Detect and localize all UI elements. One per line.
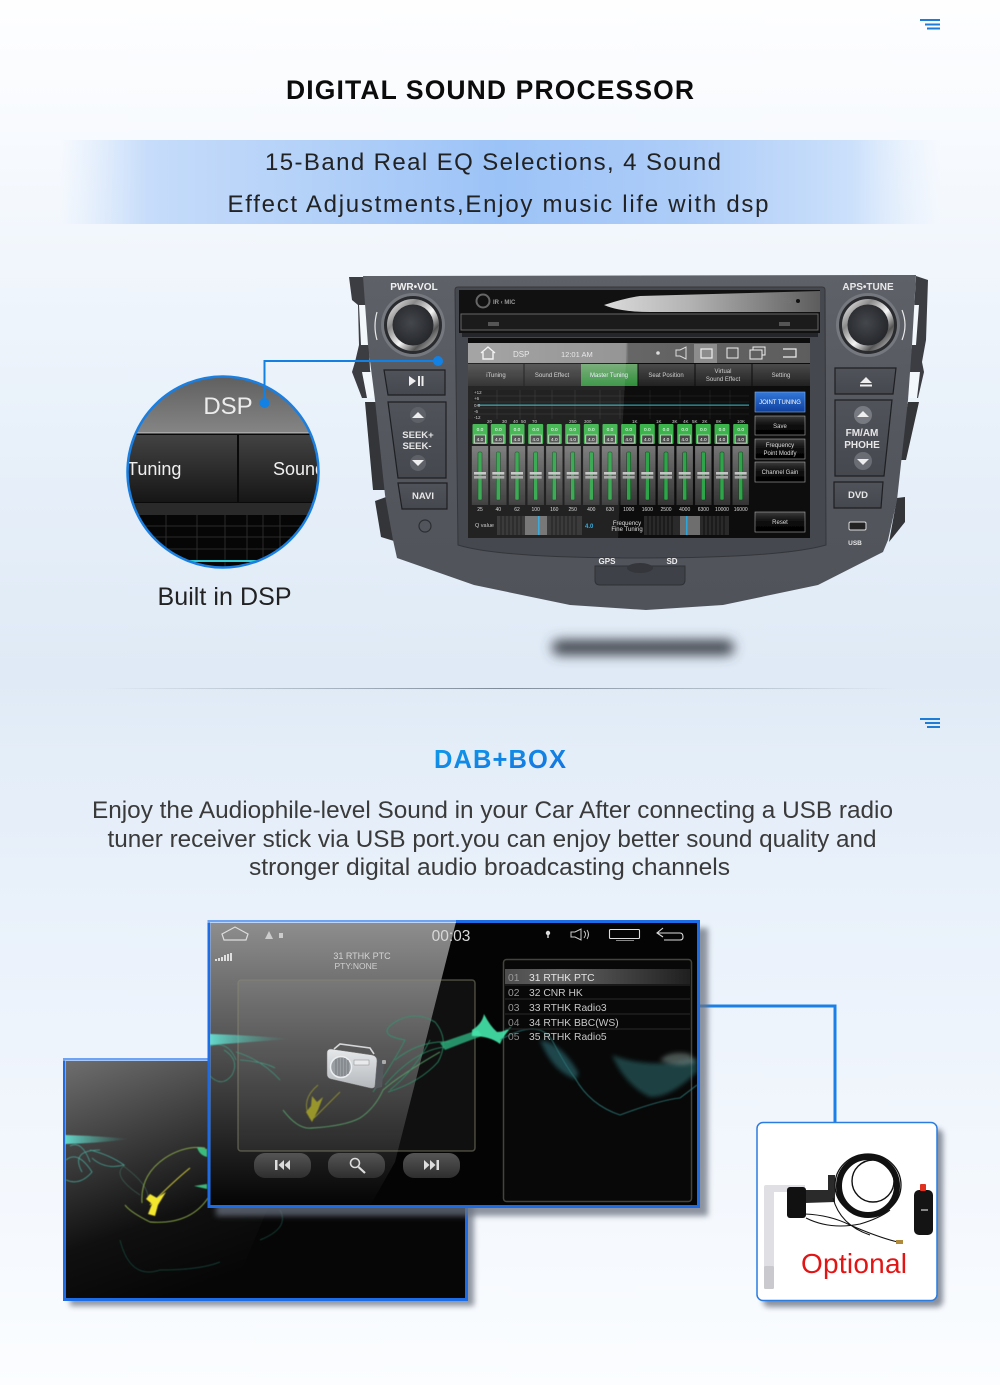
EQ value boxes: 0.0 <box>477 427 484 433</box>
left buttons: NAVI <box>412 491 434 502</box>
EQ value boxes: 0.0 <box>532 427 539 433</box>
tabs: Sound Effect <box>706 377 740 383</box>
right-side buttons: Point Modify <box>763 451 797 457</box>
EQ value boxes: 4.0 <box>607 437 614 443</box>
SD slot cover <box>595 557 685 585</box>
right-side buttons: Frequency <box>766 443 794 449</box>
EQ graph: 20 <box>487 419 493 424</box>
knob right <box>836 282 905 357</box>
smoke: green ribbon <box>210 1014 697 1128</box>
icon: menu lines top <box>920 19 940 30</box>
front panel: DAB radio screen <box>208 922 708 1216</box>
frequency labels: 40 <box>496 507 501 513</box>
arrow: DSP connector line <box>260 356 443 408</box>
EQ sliders <box>472 446 749 505</box>
right mounting bracket <box>889 276 928 542</box>
EQ graph: 10K <box>737 419 745 424</box>
list highlight row <box>505 969 690 984</box>
EQ value boxes: 4.0 <box>700 437 707 443</box>
EQ value boxes: 0.0 <box>588 427 595 433</box>
front panel: DAB radio screen: PTY:NONE <box>335 961 378 971</box>
right buttons: USB <box>848 540 862 547</box>
antenna film strip <box>764 1185 805 1289</box>
EQ value boxes: 4.0 <box>681 437 688 443</box>
description text: tuner receiver stick via USB port.you can enjoy better sound quality and <box>108 826 876 853</box>
right buttons: FM/AM <box>846 428 878 439</box>
antenna block and band <box>805 1175 835 1203</box>
EQ value boxes: 0.0 <box>495 427 502 433</box>
q value row: Fine Tuning <box>611 527 643 533</box>
description text: stronger digital audio broadcasting channels <box>249 854 730 881</box>
EQ value boxes: 4.0 <box>719 437 726 443</box>
EQ value boxes: 0.0 <box>514 427 521 433</box>
EQ graph: 1K <box>632 419 638 424</box>
station list box <box>504 960 692 1202</box>
station list <box>505 973 690 1043</box>
q value row: 4.0 <box>585 524 594 530</box>
disc slot <box>459 290 820 337</box>
EQ value boxes: 4.0 <box>514 437 521 443</box>
status bar: 12:01 AM <box>561 350 593 359</box>
optional label: Optional <box>801 1248 907 1279</box>
disc slot: IR ‹ MIC <box>493 300 516 306</box>
status icons <box>221 926 684 941</box>
shadow under head unit <box>552 640 734 655</box>
EQ value boxes: 4.0 <box>737 437 744 443</box>
EQ graph: -12 <box>474 415 481 420</box>
EQ graph: 2K <box>702 419 708 424</box>
banner: subtitle: Effect Adjustments,Enjoy music life with dsp <box>228 191 768 218</box>
cable coil <box>805 1154 901 1242</box>
station list: 05 <box>508 1032 520 1043</box>
tabs: Seat Position <box>648 373 684 379</box>
frequency labels: 6300 <box>698 507 709 513</box>
EQ graph: -6 <box>474 409 478 414</box>
EQ value boxes: 4.0 <box>663 437 670 443</box>
callout: DSP magnifier: Tuning <box>127 459 181 479</box>
EQ graph: 3K <box>672 419 678 424</box>
tabs: Master Tuning <box>590 373 628 379</box>
circle labels: DSP <box>203 393 253 420</box>
smoke: teal and yellow <box>65 1135 282 1272</box>
station list: 04 <box>508 1018 520 1029</box>
description text: Enjoy the Audiophile-level Sound in your Car After connecting a USB radio <box>92 797 893 824</box>
frequency labels: 400 <box>587 507 596 513</box>
SD slot cover: GPS <box>599 557 616 566</box>
status icons: 00:03 <box>432 928 470 945</box>
EQ value boxes: 0.0 <box>569 427 576 433</box>
EQ graph: 30 <box>502 419 508 424</box>
icon: menu lines lower <box>920 718 940 728</box>
EQ value boxes <box>472 424 748 444</box>
EQ value boxes: 4.0 <box>495 437 502 443</box>
disc slot: RES <box>778 298 792 305</box>
knob left: PWR•VOL <box>390 282 438 293</box>
EQ graph: +12 <box>474 390 482 395</box>
EQ graph: +6 <box>474 396 480 401</box>
left buttons <box>384 370 447 532</box>
EQ value boxes: 0.0 <box>737 427 744 433</box>
EQ value boxes: 0.0 <box>607 427 614 433</box>
EQ graph: 300 <box>584 419 592 424</box>
EQ value boxes: 4.0 <box>532 437 539 443</box>
playback buttons <box>254 1153 460 1178</box>
head unit <box>349 275 928 610</box>
left mounting bracket <box>349 277 394 541</box>
EQ value boxes: 0.0 <box>719 427 726 433</box>
right buttons: DVD <box>848 490 868 501</box>
EQ value boxes: 0.0 <box>625 427 632 433</box>
knob right: APS•TUNE <box>842 282 894 293</box>
frequency labels: 10000 <box>715 507 729 513</box>
right-side buttons: Save <box>773 424 787 430</box>
receiver dongle <box>914 1184 933 1235</box>
EQ value boxes: 0.0 <box>551 427 558 433</box>
screen glare <box>468 343 627 419</box>
EQ graph: 50 <box>521 419 527 424</box>
tabs: Setting <box>772 373 790 379</box>
left buttons: SEEK+ <box>402 430 434 441</box>
frequency labels: 1600 <box>642 507 653 513</box>
frequency labels <box>477 507 748 513</box>
screen bezel <box>455 287 826 558</box>
screen: DSP equalizer <box>468 338 810 538</box>
EQ value boxes: 0.0 <box>681 427 688 433</box>
callout: DSP magnifier: Sound <box>273 459 325 479</box>
frequency labels: 4000 <box>679 507 690 513</box>
icon: radio <box>327 1044 386 1089</box>
connector to optional box <box>700 1006 835 1124</box>
caption: built in DSP: Built in DSP <box>158 583 292 611</box>
EQ value boxes: 0.0 <box>700 427 707 433</box>
frequency labels: 62 <box>514 507 520 513</box>
right buttons <box>834 368 896 547</box>
heading: DAB+BOX: DAB+BOX <box>434 746 566 774</box>
signal bars <box>216 953 231 961</box>
tabs: iTuning <box>486 373 506 379</box>
SD slot cover: SD <box>666 557 678 566</box>
station list: 03 <box>508 1003 520 1014</box>
optional antenna box <box>757 1122 943 1307</box>
EQ graph <box>473 390 749 424</box>
station info: 31 RTHK PTC <box>333 951 391 961</box>
right-side buttons: Reset <box>772 520 788 526</box>
EQ graph: 1K <box>656 419 662 424</box>
station list: 34 RTHK BBC(WS) <box>529 1018 619 1029</box>
banner: subtitle: 15-Band Real EQ Selections, 4 Sound <box>265 149 721 176</box>
EQ value boxes: 4.0 <box>588 437 595 443</box>
EQ graph: 250 <box>569 419 577 424</box>
album art box <box>238 980 475 1151</box>
status bar: DSP <box>513 350 529 359</box>
tabs <box>468 364 810 386</box>
tabs: Sound Effect <box>535 373 569 379</box>
station list: 01 <box>508 973 520 984</box>
banner: subtitle <box>60 140 940 224</box>
EQ graph: 40 <box>513 419 519 424</box>
right-side buttons: JOINT TUNING <box>759 400 801 406</box>
EQ value boxes: 4.0 <box>551 437 558 443</box>
station list: 32 CNR HK <box>529 988 583 999</box>
smoke: soft blobs <box>540 1040 697 1097</box>
back panel: wallpaper screen <box>63 1060 474 1306</box>
frequency labels: 100 <box>532 507 540 513</box>
EQ value boxes: 4.0 <box>625 437 632 443</box>
unit body <box>363 275 916 610</box>
EQ graph: 8K <box>716 419 722 424</box>
EQ value boxes: 4.0 <box>569 437 576 443</box>
EQ graph: 5K <box>692 419 698 424</box>
EQ graph: 0.0 <box>474 403 481 408</box>
left buttons: SEEK- <box>402 441 432 452</box>
q value row: Frequency <box>613 521 641 527</box>
frequency labels: 160 <box>550 507 559 513</box>
frequency labels: 1000 <box>623 507 634 513</box>
EQ value boxes: 4.0 <box>644 437 651 443</box>
right-side buttons <box>755 392 805 532</box>
description text <box>92 797 893 881</box>
status bar <box>468 343 810 363</box>
frequency labels: 2500 <box>660 507 672 513</box>
right buttons: PHOHE <box>844 440 880 451</box>
q value row <box>475 516 729 535</box>
station list: 31 RTHK PTC <box>529 973 595 984</box>
EQ value boxes: 4.0 <box>477 437 484 443</box>
knob left <box>375 282 445 357</box>
right-side buttons: Channel Gain <box>762 470 798 476</box>
station list: 02 <box>508 988 520 999</box>
EQ value boxes: 0.0 <box>644 427 651 433</box>
frequency labels: 16000 <box>734 507 748 513</box>
frequency labels: 25 <box>477 507 483 513</box>
tabs: Virtual <box>715 369 731 375</box>
EQ value boxes: 0.0 <box>663 427 670 433</box>
EQ graph: 4K <box>683 419 689 424</box>
station list: 33 RTHK Radio3 <box>529 1003 607 1014</box>
frequency labels: 250 <box>569 507 577 513</box>
q value row: Q value <box>475 523 494 529</box>
EQ graph: 70 <box>532 419 538 424</box>
callout: DSP magnifier <box>127 376 325 571</box>
frequency labels: 630 <box>606 507 614 513</box>
station list: 35 RTHK Radio5 <box>529 1032 607 1043</box>
title: DIGITAL SOUND PROCESSOR <box>286 75 694 105</box>
